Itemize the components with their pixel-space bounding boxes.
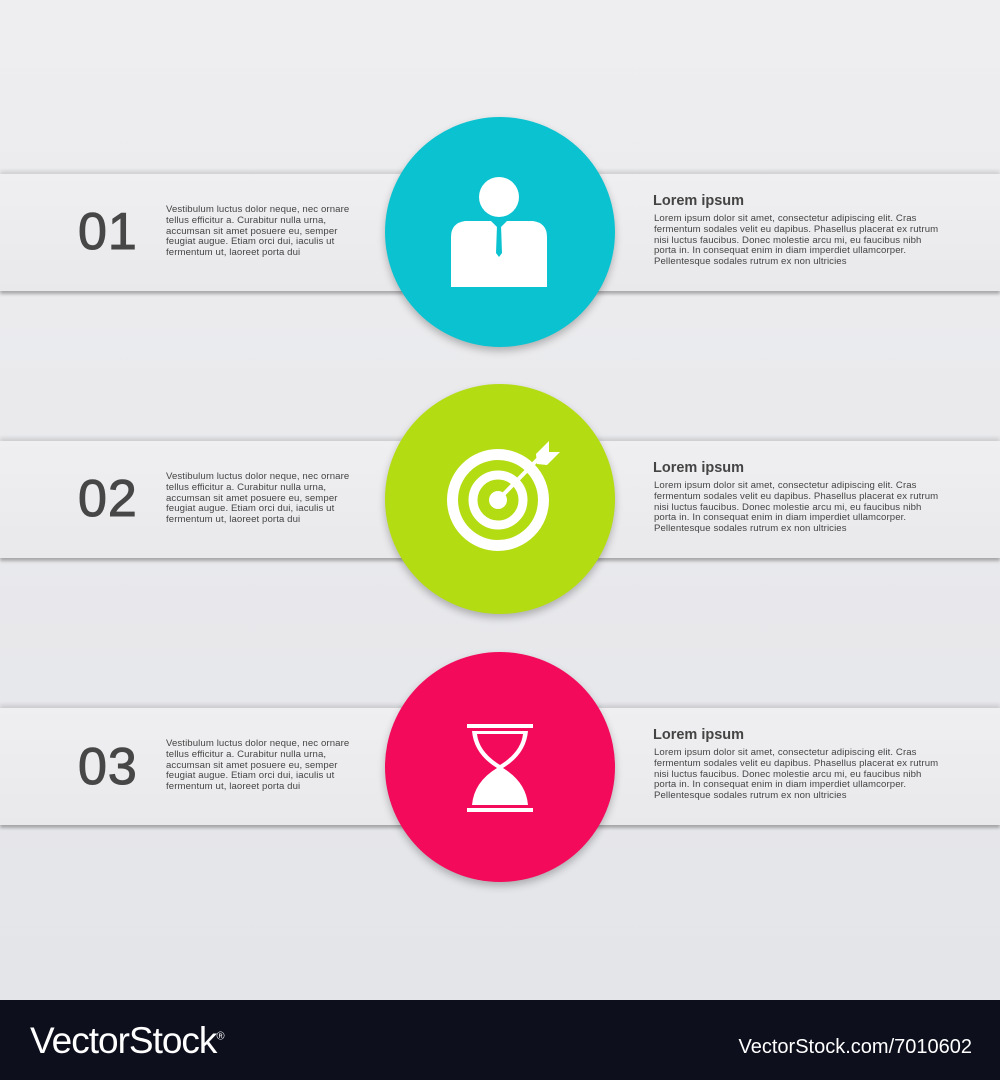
left text 3: tellus efficitur a. Curabitur nulla urna, xyxy=(166,749,326,760)
band 3 xyxy=(0,708,1000,825)
right text 2: Lorem ipsum dolor sit amet, consectetur adipiscing elit. Cras xyxy=(654,480,917,491)
right text 1: porta in. In consequat enim in diam imperdiet ullamcorper. xyxy=(654,245,906,256)
right text 2: porta in. In consequat enim in diam imperdiet ullamcorper. xyxy=(654,512,906,523)
right text 2: fermentum sodales velit eu dapibus. Phasellus placerat ex rutrum xyxy=(654,491,938,502)
right text 1: Lorem ipsum dolor sit amet, consectetur adipiscing elit. Cras xyxy=(654,213,917,224)
heading 1: Lorem ipsum xyxy=(653,193,744,209)
left text 3: fermentum ut, laoreet porta dui xyxy=(166,781,300,792)
right text 1 xyxy=(654,213,938,267)
number 03: 03 xyxy=(78,738,138,796)
left text 1: Vestibulum luctus dolor neque, nec ornare xyxy=(166,204,349,215)
right text 2: nisi luctus faucibus. Donec molestie arcu mi, eu faucibus nibh xyxy=(654,502,922,513)
left text 3: accumsan sit amet posuere eu, semper xyxy=(166,760,338,771)
left text 3: feugiat augue. Etiam orci dui, iaculis ut xyxy=(166,770,334,781)
right text 3: Lorem ipsum dolor sit amet, consectetur adipiscing elit. Cras xyxy=(654,747,917,758)
right text 3: porta in. In consequat enim in diam imperdiet ullamcorper. xyxy=(654,779,906,790)
left text 1: feugiat augue. Etiam orci dui, iaculis ut xyxy=(166,236,334,247)
number 02: 02 xyxy=(78,470,138,528)
left text 2: feugiat augue. Etiam orci dui, iaculis ut xyxy=(166,503,334,514)
footer xyxy=(0,1000,1000,1080)
left text 1: fermentum ut, laoreet porta dui xyxy=(166,247,300,258)
right text 2 xyxy=(654,480,938,534)
left text 2: Vestibulum luctus dolor neque, nec ornare xyxy=(166,471,349,482)
footer logo: VectorStock® xyxy=(30,1020,224,1061)
circle 2: target icon xyxy=(385,384,615,614)
left text 3: Vestibulum luctus dolor neque, nec ornare xyxy=(166,738,349,749)
band 2 xyxy=(0,441,1000,558)
number 01: 01 xyxy=(78,203,138,261)
left text 3 xyxy=(166,738,349,792)
left text 2: tellus efficitur a. Curabitur nulla urna, xyxy=(166,482,326,493)
heading 3: Lorem ipsum xyxy=(653,727,744,743)
band 1 xyxy=(0,174,1000,291)
heading 2: Lorem ipsum xyxy=(653,460,744,476)
right text 2: Pellentesque sodales rutrum ex non ultricies xyxy=(654,523,847,534)
footer url: VectorStock.com/7010602 xyxy=(739,1036,972,1058)
right text 3: fermentum sodales velit eu dapibus. Phasellus placerat ex rutrum xyxy=(654,758,938,769)
right text 3 xyxy=(654,747,938,801)
right text 3: nisi luctus faucibus. Donec molestie arcu mi, eu faucibus nibh xyxy=(654,769,922,780)
circle 3: hourglass icon xyxy=(385,652,615,882)
right text 1: fermentum sodales velit eu dapibus. Phasellus placerat ex rutrum xyxy=(654,224,938,235)
right text 1: Pellentesque sodales rutrum ex non ultricies xyxy=(654,256,847,267)
left text 1: accumsan sit amet posuere eu, semper xyxy=(166,226,338,237)
right text 1: nisi luctus faucibus. Donec molestie arcu mi, eu faucibus nibh xyxy=(654,235,922,246)
circle 1: person icon xyxy=(385,117,615,347)
left text 1: tellus efficitur a. Curabitur nulla urna, xyxy=(166,215,326,226)
left text 2: accumsan sit amet posuere eu, semper xyxy=(166,493,338,504)
left text 2: fermentum ut, laoreet porta dui xyxy=(166,514,300,525)
right text 3: Pellentesque sodales rutrum ex non ultricies xyxy=(654,790,847,801)
left text 1 xyxy=(166,204,349,258)
left text 2 xyxy=(166,471,349,525)
